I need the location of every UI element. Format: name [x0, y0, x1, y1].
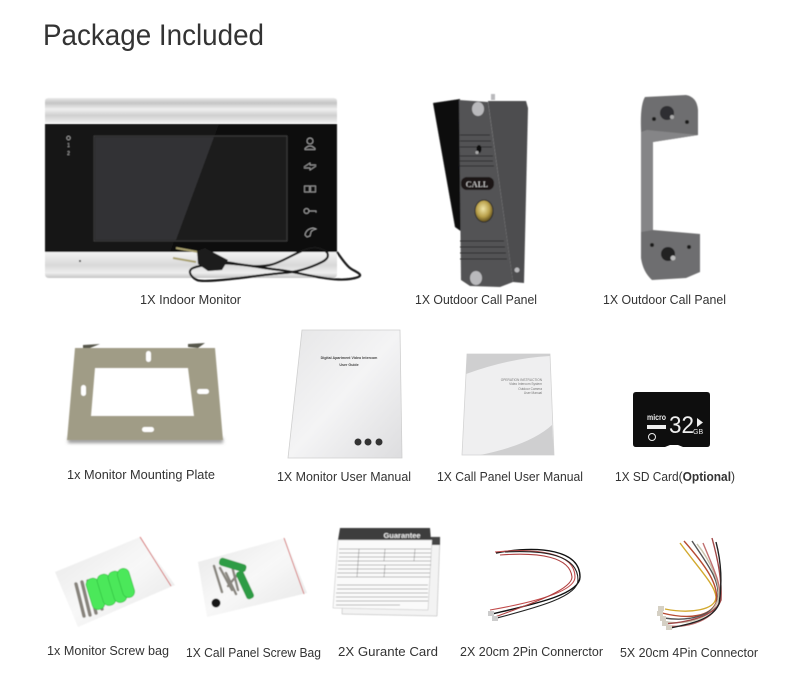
- call manual cover text: Outdoor Camera: [518, 387, 542, 391]
- label: monitor screw bag: 1x Monitor Screw bag: [47, 643, 169, 658]
- label: outdoor call panel: 1X Outdoor Call Panel: [415, 292, 537, 307]
- power cord with plug: [173, 248, 360, 281]
- panel hood: [433, 99, 462, 232]
- card front: [333, 540, 432, 610]
- bag 1 screws: [76, 580, 102, 616]
- panel camera lens: [475, 145, 482, 154]
- monitor manual cover text: [321, 356, 377, 367]
- SD card logo: GB: [693, 429, 703, 436]
- 4 pin wires: [662, 538, 721, 628]
- plate tabs: [83, 343, 205, 348]
- panel screws: [470, 94, 520, 285]
- plate body: [67, 348, 223, 440]
- monitor status indicators: [67, 136, 70, 157]
- plate shadow: [68, 438, 223, 443]
- SD card body: [633, 392, 710, 447]
- plate slots: [81, 351, 209, 432]
- bag 2 black cap: [212, 598, 220, 608]
- call manual cover text: OPERATION INSTRUCTION: [501, 378, 543, 382]
- CALL label: [461, 177, 494, 190]
- monitor manual cover text: User Guide: [339, 363, 359, 367]
- item: outdoor call panel: [433, 94, 528, 287]
- call manual swooshes: [466, 354, 554, 455]
- item: call panel user manual: [462, 354, 554, 455]
- label: indoor monitor: 1X Indoor Monitor: [140, 292, 242, 307]
- monitor manual cover text: Digital Apartment Video Intercom: [321, 356, 377, 360]
- call button: [475, 200, 493, 222]
- item: mounting plate: [67, 343, 223, 443]
- bag 1 seal: [140, 537, 171, 586]
- CALL label: CALL: [466, 179, 488, 189]
- label: 4 pin connector: 5X 20cm 4Pin Connector: [620, 645, 759, 660]
- title: Package Included: [43, 19, 264, 52]
- monitor black face: [45, 124, 337, 252]
- item: 2 pin connector: [488, 550, 580, 621]
- item: guarantee cards: [333, 528, 440, 616]
- label: SD card: 1X SD Card(Optional): [615, 469, 735, 484]
- bracket body: [641, 95, 700, 280]
- panel side face: [488, 101, 528, 283]
- item: panel bracket: [641, 95, 700, 280]
- monitor silver frame: [45, 98, 337, 278]
- monitor manual cover: [288, 330, 402, 458]
- bag 1 plastic: [55, 537, 175, 627]
- bag 2 plastic: [198, 538, 307, 617]
- bracket inner channel: [641, 130, 698, 232]
- panel grooves: [460, 135, 507, 259]
- call manual cover: [462, 354, 554, 455]
- label: outdoor call panel 2: 1X Outdoor Call Panel: [603, 292, 726, 307]
- call manual cover text: [501, 378, 543, 395]
- card terms: [336, 585, 428, 605]
- SD card logo: micro: [647, 413, 666, 422]
- bag 2 screws: [214, 566, 238, 594]
- item: indoor monitor: [45, 98, 360, 281]
- item: micro SD card: [633, 392, 710, 447]
- label: call panel screw bag: 1X Call Panel Screw Bag: [186, 645, 321, 660]
- monitor touch icons: [304, 138, 316, 237]
- item: call panel screw bag: [198, 538, 307, 617]
- call manual cover text: User Manual: [524, 391, 542, 395]
- monitor screen: [94, 136, 287, 241]
- 4 pin plugs: [657, 606, 672, 630]
- SD card logo: 32: [669, 412, 694, 439]
- 2 pin plugs: [488, 611, 498, 621]
- bag 2 seal: [284, 538, 304, 594]
- item: monitor screw bag: [55, 537, 175, 627]
- 2 pin wires: [490, 550, 580, 618]
- card back: [342, 537, 440, 616]
- label: monitor manual: 1X Monitor User Manual: [277, 469, 411, 484]
- label: guarantee card: 2X Gurante Card: [338, 644, 438, 659]
- bracket holes: [650, 106, 691, 261]
- item: monitor user manual: [288, 330, 402, 458]
- card form table: [337, 549, 431, 577]
- label: call manual: 1X Call Panel User Manual: [437, 469, 583, 484]
- SD card logo: [647, 412, 703, 440]
- monitor status indicators: 2: [67, 151, 70, 157]
- card header: Guarantee: [383, 531, 421, 540]
- item: 4 pin connector: [657, 538, 721, 630]
- bag 2 green anchors: [218, 557, 255, 600]
- monitor manual logos: [354, 438, 382, 446]
- panel front face: [459, 100, 513, 287]
- label: 2 pin connector: 2X 20cm 2Pin Connerctor: [460, 644, 604, 659]
- monitor status indicators: 1: [67, 143, 70, 149]
- call manual cover text: Video Intercom System: [509, 382, 542, 386]
- bag 1 green anchors: [85, 567, 136, 611]
- label: mounting plate: 1x Monitor Mounting Plate: [67, 467, 215, 482]
- monitor microphone dot: [79, 260, 81, 262]
